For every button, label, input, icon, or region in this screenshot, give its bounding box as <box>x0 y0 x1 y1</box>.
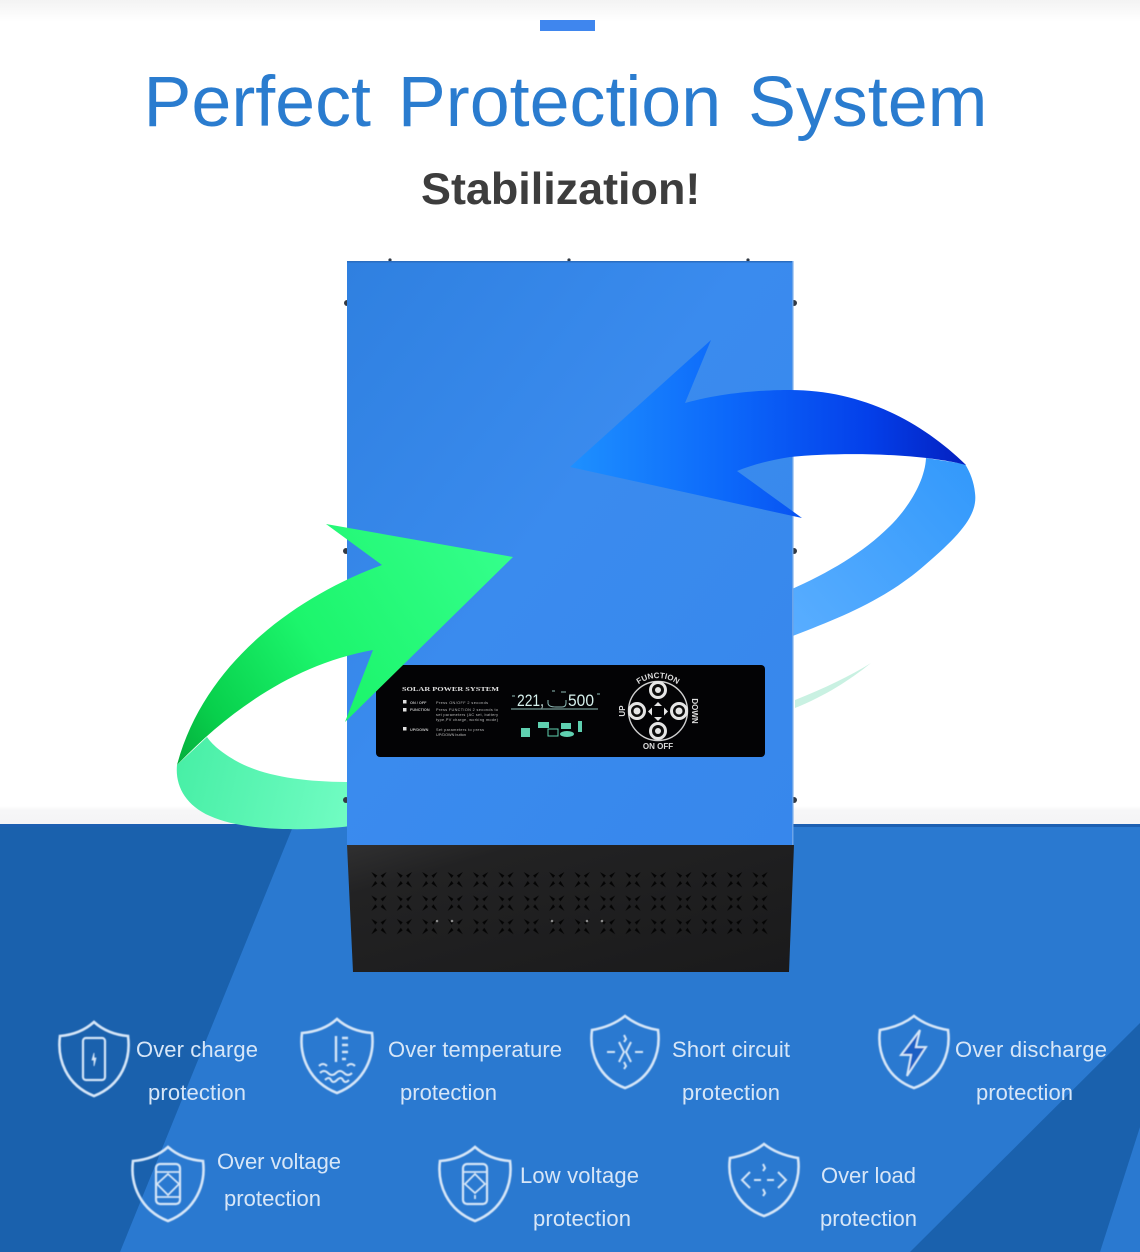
label: protection <box>533 1206 631 1231</box>
panel instructions: Set parameters to press <box>436 728 484 732</box>
LCD display: 221, <box>517 691 544 710</box>
icon: shield over load <box>729 1144 799 1216</box>
item: over load <box>729 1144 917 1231</box>
icon: shield short circuit <box>591 1016 659 1088</box>
control dial: UP <box>618 705 627 717</box>
item: short circuit <box>591 1016 790 1105</box>
panel instructions: Press ON/OFF 2 seconds <box>436 701 488 705</box>
title: Perfect Protection System <box>144 62 987 142</box>
item: low voltage <box>439 1147 639 1231</box>
label: Over voltage <box>217 1149 341 1174</box>
item: over discharge <box>879 1016 1107 1105</box>
label: Short circuit <box>672 1037 790 1062</box>
device screws <box>343 258 797 803</box>
arrow ribbon: blue back <box>790 458 975 708</box>
label <box>820 1163 917 1231</box>
panel instructions: Press FUNCTION 2 seconds to <box>436 708 498 712</box>
protection features <box>59 1016 1107 1231</box>
icon: shield battery voltage <box>132 1147 204 1221</box>
LCD display: 500 <box>568 691 594 710</box>
label <box>520 1163 639 1231</box>
panel instructions: SOLAR POWER SYSTEM <box>402 686 499 693</box>
label: protection <box>224 1186 321 1211</box>
item: over charge <box>59 1022 258 1105</box>
label: Over discharge <box>955 1037 1107 1062</box>
control panel <box>376 665 765 757</box>
label <box>388 1037 562 1105</box>
label: protection <box>148 1080 246 1105</box>
subtitle: Stabilization! <box>421 163 700 214</box>
LCD display <box>511 691 600 737</box>
panel instructions <box>402 686 499 737</box>
control dial: FUNCTION <box>636 672 680 684</box>
label <box>955 1037 1107 1105</box>
panel instructions: UP/DOWN <box>410 728 429 732</box>
panel instructions: UP/DOWN button <box>436 733 466 737</box>
panel instructions: FUNCTION <box>410 708 430 712</box>
label <box>672 1037 790 1105</box>
arrow: green front <box>177 524 513 765</box>
label <box>217 1149 341 1211</box>
inverter device <box>343 258 797 972</box>
label: Low voltage <box>520 1163 639 1188</box>
panel instructions: ON / OFF <box>410 701 427 705</box>
panel: blue lower background <box>0 824 1140 1252</box>
panel instructions: set parameters (AC set, battery <box>436 713 498 717</box>
label: protection <box>976 1080 1073 1105</box>
label: Over charge <box>136 1037 258 1062</box>
label: Over load <box>821 1163 916 1188</box>
arrow: blue front <box>570 340 966 518</box>
item: over temperature <box>301 1019 562 1105</box>
label <box>136 1037 258 1105</box>
arrow ribbon: green back <box>177 737 352 829</box>
icon: shield battery low voltage <box>439 1147 511 1221</box>
accent bar <box>540 20 595 31</box>
item: over voltage <box>132 1147 341 1221</box>
bottom vent cover <box>347 845 794 972</box>
label: protection <box>400 1080 497 1105</box>
label: Over temperature <box>388 1037 562 1062</box>
panel instructions: type,PV charge, working mode) <box>436 718 499 722</box>
control dial: ON OFF <box>643 742 673 751</box>
device body <box>347 261 794 845</box>
label: protection <box>820 1206 917 1231</box>
control dial: DOWN <box>690 698 699 724</box>
icon: shield battery <box>59 1022 129 1096</box>
label: protection <box>682 1080 780 1105</box>
icon: shield lightning <box>879 1016 949 1088</box>
icon: shield thermometer <box>301 1019 373 1093</box>
control dial <box>618 672 699 751</box>
